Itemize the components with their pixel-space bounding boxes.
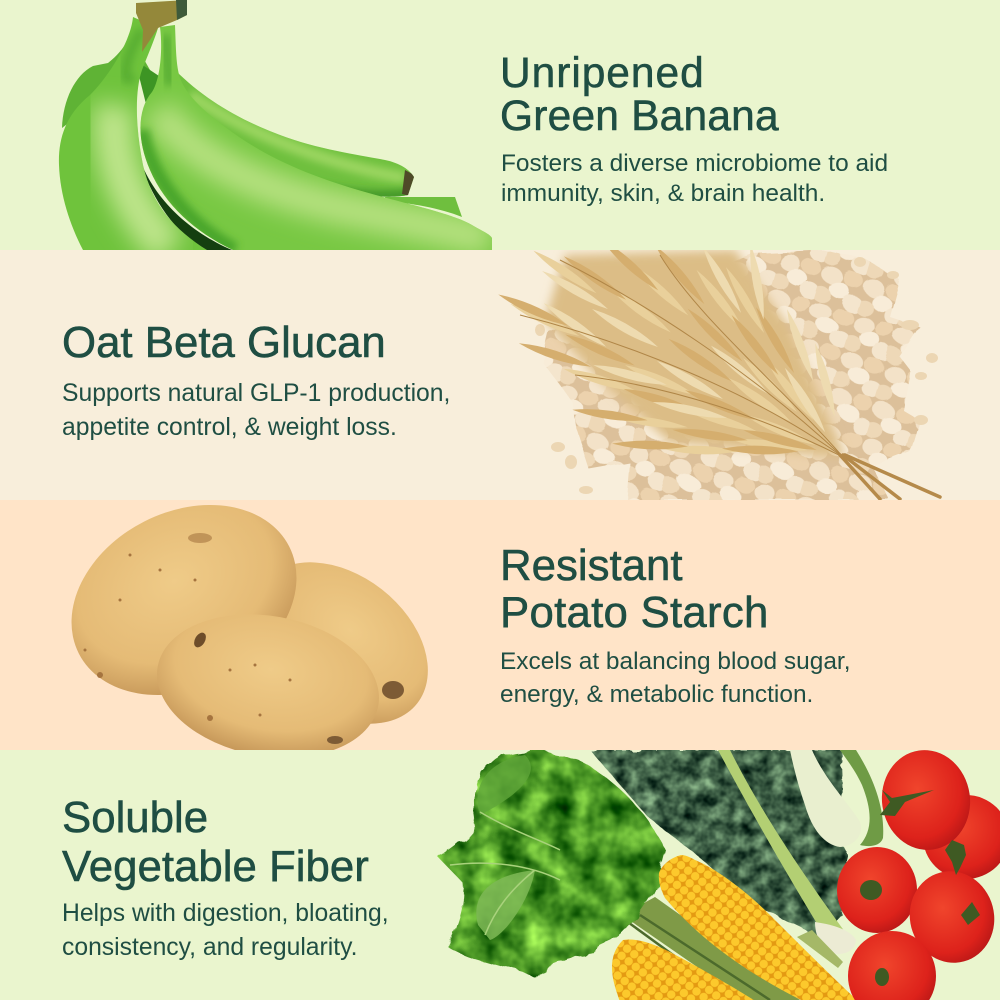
oat flakes	[543, 250, 920, 500]
kale stalk	[718, 750, 845, 945]
lettuce	[438, 752, 666, 975]
corn husk	[622, 897, 800, 1000]
text: vegetable benefit	[62, 900, 389, 960]
tomatoes	[837, 744, 1000, 1000]
small banana tip	[385, 197, 462, 217]
heading: unripened green banana	[500, 50, 779, 140]
text: banana benefit: immunity, skin, & brain health.	[501, 180, 825, 206]
front banana	[130, 20, 500, 255]
heading: unripened green banana: Green Banana	[500, 93, 779, 140]
panel: unripened green banana	[58, 0, 886, 250]
heading: unripened green banana: Unripened	[500, 50, 705, 97]
heading: soluble vegetable fiber: Vegetable Fiber	[62, 842, 369, 890]
text: vegetable benefit: consistency, and regularity.	[62, 934, 357, 960]
text: potato benefit: Excels at balancing blood sugar,	[500, 648, 851, 675]
left potato	[39, 468, 329, 732]
heading: soluble vegetable fiber	[62, 793, 369, 890]
heading: resistant potato starch	[500, 541, 769, 637]
icon: green bananas	[58, 0, 492, 250]
heading: resistant potato starch: Potato Starch	[500, 588, 769, 637]
text: oat benefit	[62, 380, 450, 440]
panel: resistant potato starch	[0, 500, 1000, 750]
heading: resistant potato starch: Resistant	[500, 541, 683, 590]
front potato	[146, 598, 390, 774]
text: banana benefit	[501, 150, 888, 206]
panel: oat beta glucan	[0, 250, 1000, 500]
icon: potatoes	[72, 505, 428, 750]
back potato	[221, 529, 459, 757]
text: vegetable benefit: Helps with digestion, bloating,	[62, 900, 389, 927]
scattered flakes	[535, 257, 938, 494]
text: potato benefit: energy, & metabolic function.	[500, 681, 813, 708]
icon: oats and wheat	[498, 250, 942, 500]
banana stem	[136, 0, 187, 52]
leek	[790, 750, 861, 847]
corn cobs	[659, 855, 859, 1000]
icon: vegetables	[437, 750, 1000, 1000]
text: potato benefit	[500, 648, 851, 708]
heading: soluble vegetable fiber: Soluble	[62, 793, 208, 842]
white stalk base	[815, 922, 856, 954]
left banana	[58, 17, 207, 250]
wheat bundle	[497, 236, 940, 499]
heading: oat beta glucan: Oat Beta Glucan	[62, 318, 386, 367]
text: oat benefit: appetite control, & weight loss.	[62, 414, 397, 440]
tomato stems	[860, 790, 980, 986]
text: oat benefit: Supports natural GLP-1 production,	[62, 380, 450, 407]
text: banana benefit: Fosters a diverse microbiome to aid	[501, 150, 888, 177]
back banana	[178, 74, 414, 197]
kale	[590, 750, 845, 937]
panel: soluble vegetable fiber	[0, 750, 1000, 1000]
